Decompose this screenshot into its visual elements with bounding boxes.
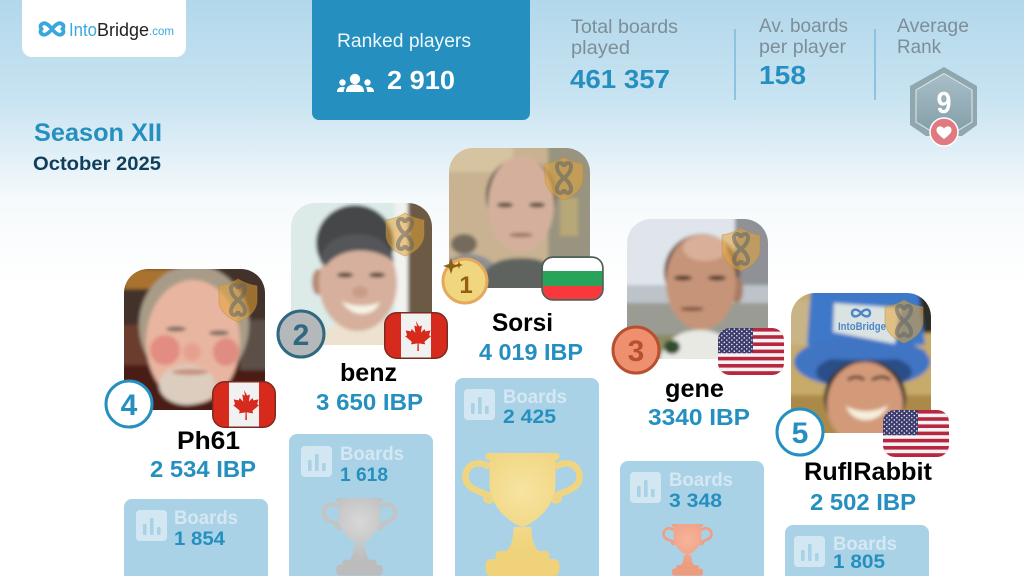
card: benz boards: 1 618 — [340, 465, 388, 486]
icon: people — [337, 74, 374, 92]
logo card — [22, 0, 186, 57]
player 4: Ph61 — [106, 263, 275, 576]
card: Ph61 boards — [124, 499, 268, 576]
player 5: RuflRabbit — [777, 287, 949, 576]
name: benz: benz — [340, 359, 397, 387]
icon: shield — [545, 157, 583, 200]
logo wordmark: Bridge — [97, 19, 149, 40]
photo: Ph61 — [124, 269, 265, 410]
icon: shield — [219, 279, 257, 322]
photo: Sorsi — [449, 148, 590, 288]
stat: total boards played — [570, 16, 678, 94]
rank badge 5 — [777, 409, 823, 455]
stat: total boards played: played — [571, 37, 630, 59]
card: gene boards — [620, 461, 764, 576]
card: Sorsi boards — [455, 378, 599, 576]
trophy: bronze — [664, 524, 711, 576]
card: Ph61 boards: Boards — [174, 508, 238, 529]
score: benz: 3 650 IBP — [316, 389, 423, 415]
name: Sorsi: Sorsi — [492, 309, 553, 337]
card: RuflRabbit boards: Boards — [833, 534, 897, 555]
flag: Canada — [213, 382, 275, 427]
rank badge 4 — [106, 381, 152, 427]
stat: average boards per player: Av. boards — [759, 15, 848, 37]
player 1: Sorsi — [443, 142, 603, 576]
icon: shield — [885, 300, 923, 343]
stat: average boards per player — [759, 15, 848, 90]
stat: total boards played: Total boards — [571, 16, 678, 38]
logo wordmark: .com — [149, 26, 174, 38]
name: Ph61: Ph61 — [177, 427, 240, 455]
panel: ranked players — [312, 0, 530, 120]
heading: season: Season XII — [34, 119, 162, 147]
label: ranked players: Ranked players — [337, 31, 471, 52]
rank badge 1 — [443, 258, 487, 303]
player 2: benz — [278, 197, 447, 576]
rank badge 2: 2 — [293, 319, 309, 352]
trophy: gold — [466, 453, 580, 576]
score: Ph61: 2 534 IBP — [150, 456, 256, 482]
flag: Bulgaria — [542, 257, 603, 300]
rank badge 3: 3 — [628, 335, 644, 368]
card: gene boards: 3 348 — [669, 491, 722, 512]
card: benz boards — [289, 434, 433, 576]
score: gene: 3340 IBP — [648, 404, 750, 430]
photo: benz — [291, 203, 432, 345]
flag: USA — [883, 410, 949, 457]
card: Sorsi boards: Boards — [503, 387, 567, 408]
stat: average boards per player: 158 — [759, 60, 806, 90]
card: gene boards: Boards — [669, 470, 733, 491]
trophy: silver — [324, 498, 395, 575]
icon: IntoBridge logo mark — [41, 23, 63, 35]
icon: rank hexagon badge: 9 — [936, 85, 952, 120]
flag: USA — [718, 328, 784, 375]
card: RuflRabbit boards — [785, 525, 929, 576]
card: benz boards: Boards — [340, 444, 404, 465]
stat: average rank: Average — [897, 15, 969, 37]
photo: RuflRabbit — [791, 293, 931, 433]
flag: Canada — [385, 313, 447, 358]
name: RuflRabbit: RuflRabbit — [804, 458, 933, 486]
score: Sorsi: 4 019 IBP — [479, 339, 583, 365]
rank badge 4: 4 — [121, 389, 138, 422]
icon: shield — [722, 228, 760, 271]
photo: gene — [627, 219, 768, 359]
heading: month: October 2025 — [33, 153, 161, 175]
player 3: gene — [613, 213, 784, 576]
logo wordmark: Into — [69, 19, 97, 40]
rank badge 1: 1 — [459, 272, 473, 299]
value: ranked players: 2 910 — [387, 65, 455, 95]
score: RuflRabbit: 2 502 IBP — [810, 489, 916, 515]
hat label: IntoBridge — [838, 321, 886, 333]
name: gene: gene — [665, 375, 724, 403]
icon: sparkles — [443, 258, 463, 274]
rank badge 2 — [278, 311, 324, 357]
stat: average rank: Rank — [897, 36, 941, 58]
card: Sorsi boards: 2 425 — [503, 407, 556, 428]
stat: average boards per player: per player — [759, 36, 847, 58]
logo wordmark — [69, 19, 174, 40]
icon: shield — [386, 213, 424, 256]
stat: total boards played: 461 357 — [570, 64, 670, 94]
card: Ph61 boards: 1 854 — [174, 529, 225, 550]
rank badge 5: 5 — [792, 417, 808, 450]
stat: average rank — [897, 15, 977, 146]
rank badge 3 — [613, 327, 659, 373]
card: RuflRabbit boards: 1 805 — [833, 552, 885, 573]
